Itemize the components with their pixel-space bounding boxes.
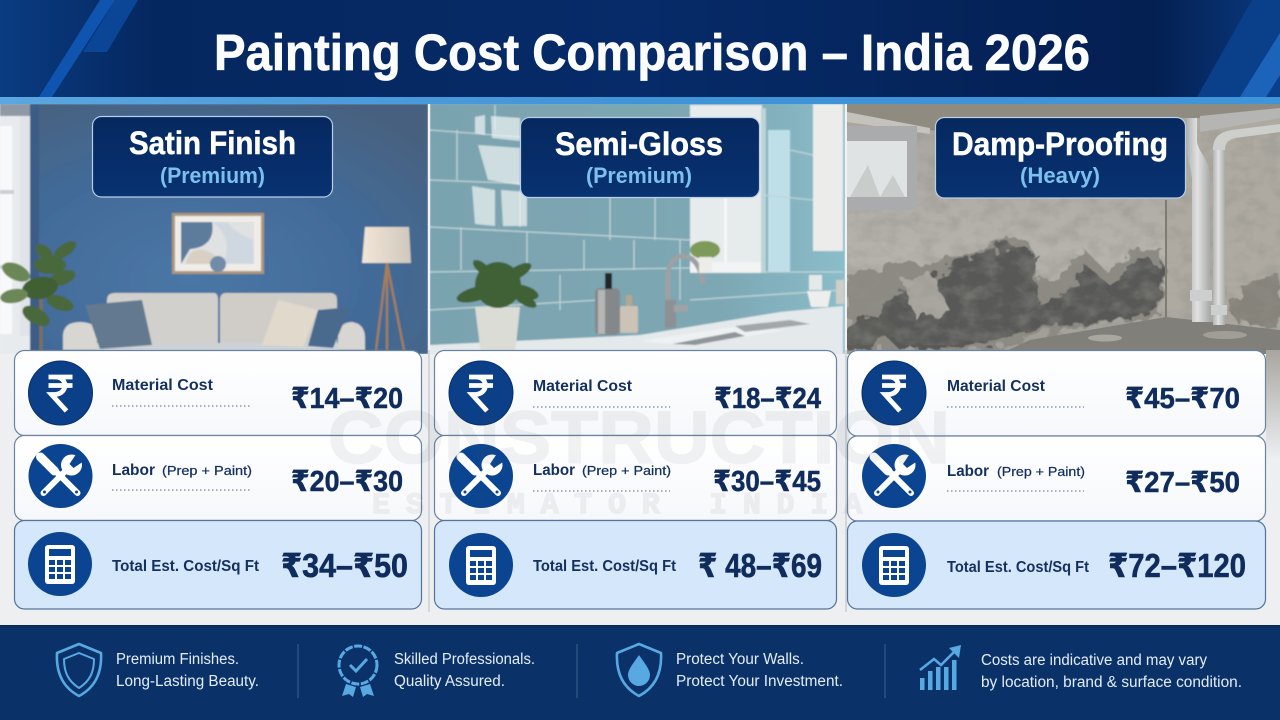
text: protect your walls <box>676 651 843 690</box>
heading: damp-proofing tag: Damp-Proofing <box>952 126 1168 162</box>
heading: damp-proofing tag <box>936 118 1186 198</box>
watermark <box>328 396 950 523</box>
row: labor: ₹27–₹50 <box>1125 467 1240 499</box>
text: premium finishes: Premium Finishes. <box>116 651 239 668</box>
icon: water drop shield <box>617 644 661 696</box>
basement window <box>847 112 930 210</box>
row: material cost <box>434 350 836 436</box>
watermark: ESTIMATOR INDIA <box>372 489 862 523</box>
text: skilled professionals: Skilled Professionals. <box>394 651 535 668</box>
icon: rupee <box>449 361 513 425</box>
text: premium finishes: Long-Lasting Beauty. <box>116 673 259 690</box>
row: material cost <box>848 350 1266 436</box>
row: labor: (Prep + Paint) <box>162 463 252 478</box>
row: material cost: ₹18–₹24 <box>714 383 821 415</box>
heading: semi-gloss tag <box>520 118 760 198</box>
heading: satin finish tag <box>92 116 332 197</box>
row: total: ₹72–₹120 <box>1108 547 1246 584</box>
row: total: Total Est. Cost/Sq Ft <box>947 559 1090 576</box>
heading: semi-gloss tag: (Premium) <box>586 163 692 188</box>
row: labor: Labor <box>533 462 575 479</box>
row: total <box>848 521 1266 609</box>
row: labor: Labor <box>112 462 155 479</box>
row: labor: Labor <box>947 463 989 480</box>
panel: satin finish column <box>14 116 422 609</box>
row: labor <box>14 436 422 520</box>
row: material cost <box>14 350 422 436</box>
icon: tools <box>449 444 513 508</box>
accent bar <box>0 97 1280 104</box>
text: skilled professionals: Quality Assured. <box>394 673 505 690</box>
icon: tools <box>28 444 92 508</box>
panel: damp-proofing column <box>848 118 1266 609</box>
column gutters <box>429 104 846 350</box>
row: total: Total Est. Cost/Sq Ft <box>533 558 677 575</box>
watermark: CONSTRUCTION <box>328 396 950 479</box>
row: labor <box>848 436 1266 521</box>
footer band <box>0 625 1280 720</box>
row: labor <box>434 436 836 520</box>
row: material cost: Material Cost <box>947 378 1045 395</box>
title: Painting Cost Comparison – India 2026 <box>214 24 1090 81</box>
floor tone right of cards <box>1266 350 1280 460</box>
text: protect your walls: Protect Your Walls. <box>676 651 804 668</box>
icon: rising bar chart <box>920 645 961 690</box>
heading: satin finish tag: Satin Finish <box>129 125 296 161</box>
text: disclaimer: by location, brand & surface condition. <box>981 674 1242 691</box>
row: labor: (Prep + Paint) <box>997 464 1085 479</box>
icon: rupee <box>28 361 92 425</box>
text: disclaimer: Costs are indicative and may vary <box>981 652 1207 669</box>
row: material cost: ₹14–₹20 <box>291 383 403 415</box>
icon: rupee <box>862 361 926 425</box>
row: material cost: ₹45–₹70 <box>1125 383 1240 415</box>
text: disclaimer <box>981 652 1242 691</box>
icon: calculator <box>449 533 513 597</box>
panel: semi-gloss column <box>434 118 836 609</box>
icon: shield <box>57 644 101 696</box>
icon: tools <box>862 444 926 508</box>
row: labor: (Prep + Paint) <box>582 463 671 478</box>
heading: damp-proofing tag: (Heavy) <box>1020 163 1100 188</box>
text: skilled professionals <box>394 651 535 690</box>
row: total: ₹34–₹50 <box>281 547 408 584</box>
heading: semi-gloss tag: Semi-Gloss <box>555 126 723 162</box>
heading: satin finish tag: (Premium) <box>160 163 265 188</box>
icon: calculator <box>28 532 92 596</box>
row: material cost: Material Cost <box>533 378 632 395</box>
photo: living room with satin blue wall <box>0 104 428 354</box>
icon: award badge <box>339 646 377 697</box>
row: labor: ₹30–₹45 <box>713 466 821 498</box>
row: total: Total Est. Cost/Sq Ft <box>112 558 260 575</box>
row: material cost: Material Cost <box>112 377 213 394</box>
row: total: ₹ 48–₹69 <box>698 547 822 584</box>
row: total <box>14 520 422 609</box>
row: labor: ₹20–₹30 <box>291 466 403 498</box>
header banner <box>0 0 1280 104</box>
lower gutters <box>429 350 846 612</box>
text: premium finishes <box>116 651 259 690</box>
row: total <box>434 520 836 609</box>
photo: kitchen with semi-gloss tile <box>430 104 845 354</box>
icon: calculator <box>862 533 926 597</box>
text: protect your walls: Protect Your Investment. <box>676 673 843 690</box>
wall mottling texture <box>847 130 1280 345</box>
photo: damp basement wall with pipes <box>847 104 1280 354</box>
